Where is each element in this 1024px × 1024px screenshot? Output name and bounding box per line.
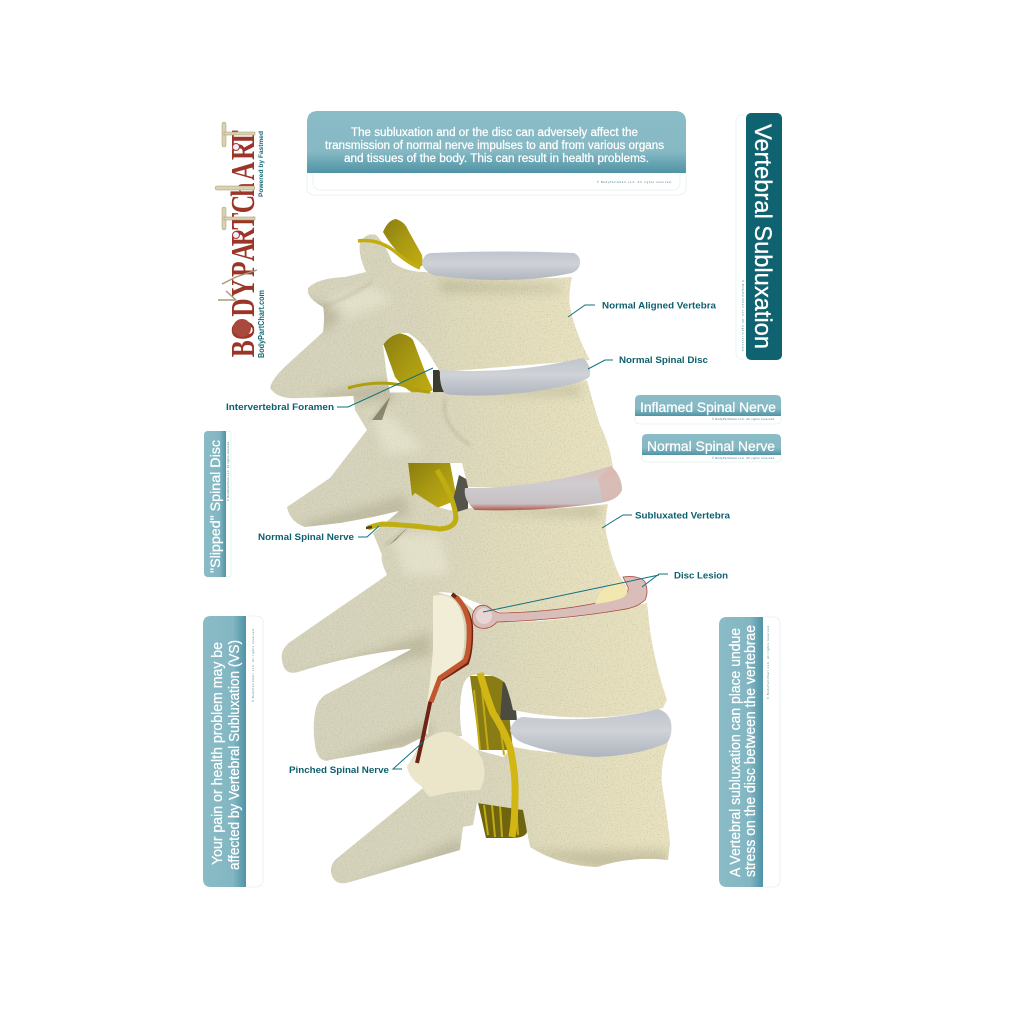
panel: inflamed spinal nerve: Inflamed Spinal Nerve [640, 399, 776, 415]
logo heart [233, 319, 251, 337]
label: subluxated vertebra [602, 510, 731, 528]
panel: intro statement [307, 111, 686, 195]
panel: disc stress statement: stress on the disc between the vertebrae [743, 625, 759, 877]
panel: slipped spinal disc: © BodyPartChart LLC. All rights reserved. [226, 441, 230, 501]
panel: slipped spinal disc [204, 431, 231, 577]
vertebra 2 [287, 380, 613, 527]
panel: title [736, 113, 782, 360]
logo wordmark: BODYPARTChART [223, 130, 262, 357]
logo: BodyPartChart [215, 122, 266, 358]
label: normal spinal nerve [258, 526, 379, 543]
intro text [325, 127, 664, 165]
title copyright: © BodyPartChart LLC. All rights reserved. [741, 280, 745, 352]
normal disc second [440, 358, 590, 396]
panel: disc stress statement [719, 617, 780, 887]
panel: disc stress statement: A Vertebral subluxation can place undue [728, 628, 744, 877]
back nerve roots [383, 333, 527, 838]
panel: inflamed spinal nerve [635, 395, 781, 424]
vertebra 4 [314, 592, 667, 761]
intro text: transmission of normal nerve impulses to and from various organs [325, 140, 664, 152]
panel: normal spinal nerve [642, 434, 781, 462]
logo bone letters [215, 122, 257, 300]
dark notches [372, 397, 408, 545]
label: intervertebral foramen [226, 368, 433, 413]
normal disc bottom [510, 709, 672, 757]
label: normal spinal disc [588, 355, 708, 369]
logo url: BodyPartChart.com [256, 290, 266, 358]
label: intervertebral foramen: Intervertebral Foramen [226, 402, 334, 413]
bone shading [295, 280, 668, 888]
inflamed spinal nerve [417, 594, 471, 763]
label: normal aligned vertebra [568, 300, 717, 317]
vertebra 3 [282, 493, 627, 673]
panel: pain statement: affected by Vertebral Subluxation (VS) [227, 640, 243, 870]
front nerve: normal spinal nerve [348, 219, 456, 529]
inflamed disc third [465, 466, 622, 510]
lighter articular joint [423, 595, 464, 735]
panel: disc stress statement: © BodyPartChart LLC. All rights reserved. [766, 625, 770, 699]
logo powered by: Powered by Fastmed [258, 131, 265, 197]
title text: Vertebral Subluxation [749, 124, 776, 349]
intro copyright: © BodyPartChart LLC. All rights reserved. [597, 180, 672, 184]
label: normal spinal nerve: Normal Spinal Nerve [258, 532, 354, 543]
label: pinched spinal nerve [289, 742, 423, 776]
panel: inflamed spinal nerve: © BodyPartChart LLC. All rights reserved. [712, 417, 775, 421]
lower nerve [480, 673, 515, 837]
intro text: and tissues of the body. This can result in health problems. [344, 153, 649, 165]
inflamed disc lesion [472, 577, 647, 628]
vertebra 5 [331, 730, 670, 883]
vertebra 1 [270, 234, 590, 398]
panel: pain statement [203, 616, 263, 887]
logo eyes [232, 144, 240, 238]
label: pinched spinal nerve: Pinched Spinal Nerve [289, 765, 389, 776]
panel: pain statement: Your pain or health problem may be [210, 642, 226, 865]
normal disc top [422, 252, 580, 280]
intervertebral discs [422, 252, 672, 757]
intro text: The subluxation and or the disc can adversely affect the [351, 127, 638, 139]
spine illustration [270, 219, 672, 888]
label: disc lesion: Disc Lesion [674, 570, 728, 582]
panel: pain statement: © BodyPartChart LLC. All rights reserved. [251, 628, 255, 702]
panel: slipped spinal disc: "Slipped" Spinal Disc [207, 440, 223, 573]
label: normal aligned vertebra: Normal Aligned Vertebra [602, 300, 717, 312]
label: subluxated vertebra: Subluxated Vertebra [635, 510, 731, 522]
panel: normal spinal nerve: © BodyPartChart LLC. All rights reserved. [712, 456, 775, 460]
vertebrae bones [270, 234, 670, 883]
label: normal spinal disc: Normal Spinal Disc [619, 355, 708, 366]
panel: normal spinal nerve: Normal Spinal Nerve [647, 438, 775, 454]
label: disc lesion [483, 570, 728, 612]
